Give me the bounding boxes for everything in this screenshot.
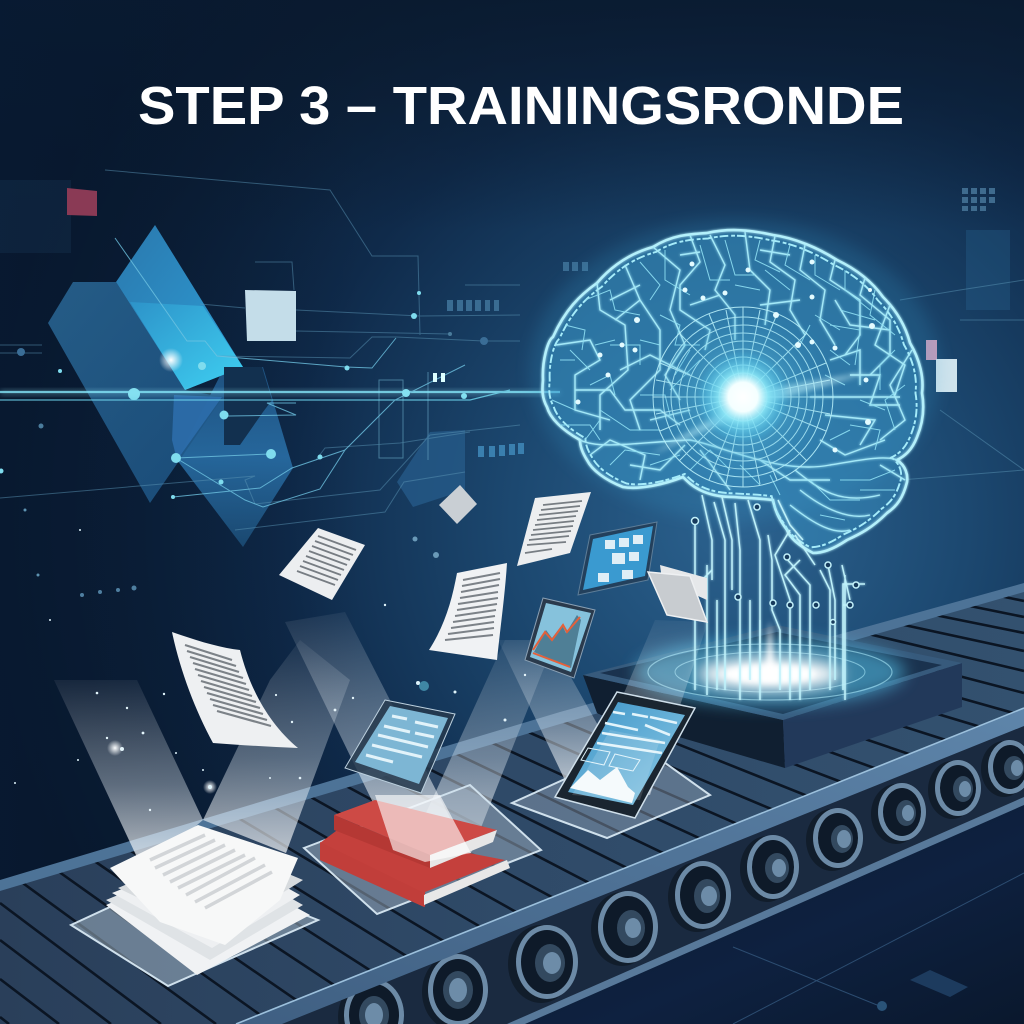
small data bars <box>433 262 588 457</box>
conveyor side panel <box>236 708 1024 1024</box>
geometric panels: left blue shapes <box>48 225 465 547</box>
clear plate: documents <box>71 870 318 986</box>
paper stack <box>106 825 310 975</box>
tablet: on belt <box>555 692 695 818</box>
front rail <box>236 708 1024 1024</box>
brain inner gyri band <box>549 236 917 547</box>
paper: flying sheet C <box>429 563 507 660</box>
stem end nodes <box>692 504 859 624</box>
icon: small grid top right <box>962 188 995 211</box>
light streak <box>650 372 870 455</box>
red books <box>320 800 510 907</box>
conveyor rollers <box>338 740 1024 1024</box>
glow disc on platform <box>635 638 905 706</box>
clear plate: books <box>304 785 541 914</box>
floor <box>500 795 1024 1024</box>
light beams <box>54 612 708 870</box>
brain nodes <box>576 260 875 452</box>
data nodes <box>0 291 488 558</box>
book beam glow <box>375 795 471 862</box>
brain glow halo <box>530 220 940 520</box>
tablet: above books <box>345 700 455 793</box>
glowing core <box>647 301 839 493</box>
stars <box>14 508 526 811</box>
brain <box>530 220 940 553</box>
glowing beam band <box>0 390 560 395</box>
paper: flying sheet D <box>517 492 591 566</box>
icon: right side squares <box>926 340 957 392</box>
brain fine traces <box>552 240 905 520</box>
paper: flying sheet A <box>172 632 298 748</box>
platform base <box>583 625 962 768</box>
stem core glow <box>764 620 776 680</box>
tablet beam overlay <box>572 730 660 800</box>
tablet: flying top <box>578 522 657 595</box>
icon: red square <box>67 188 97 216</box>
icon: grey diamond <box>439 485 477 524</box>
data circuit lines <box>0 238 560 507</box>
brain outline <box>542 230 923 553</box>
tablet: flying chart <box>525 598 595 678</box>
clear plate: tablet <box>512 745 710 838</box>
circuit stem <box>695 495 865 700</box>
title: STEP 3 – TRAININGSRONDE <box>138 76 904 136</box>
paper: flying sheet B <box>279 528 365 600</box>
conveyor belt surface <box>0 590 1024 1024</box>
icon: white square <box>245 290 296 341</box>
radial core grid <box>653 307 833 487</box>
brain circuit traces <box>556 232 912 531</box>
back rail <box>0 583 1024 891</box>
folder: flying <box>648 565 707 622</box>
lower rail <box>507 797 1024 1024</box>
faint circuit lines <box>0 170 1024 530</box>
